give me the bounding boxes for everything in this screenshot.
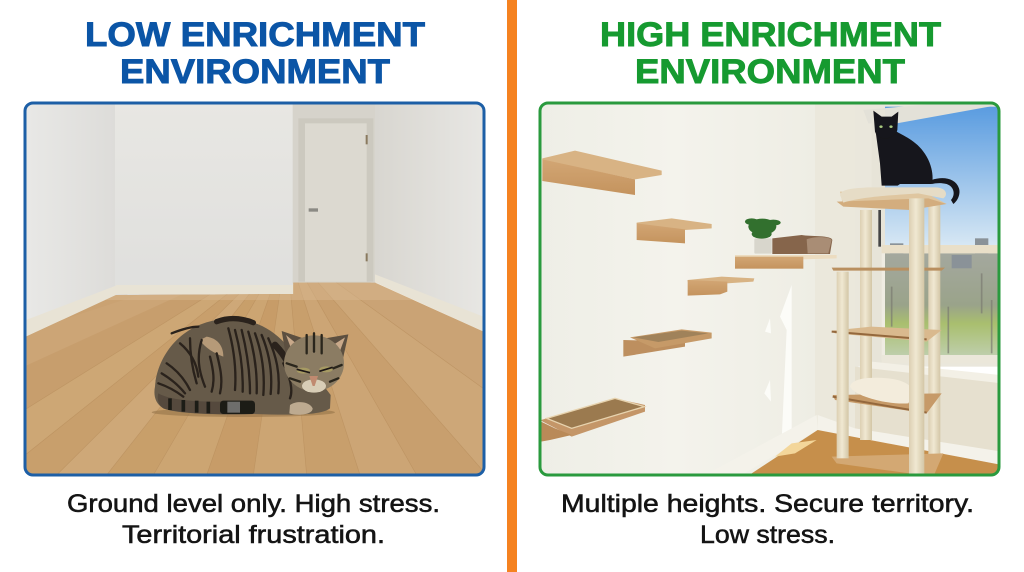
wall shelf 6 carpeted <box>541 398 645 442</box>
wood floor <box>752 430 998 474</box>
black cat on top of the tree <box>873 111 960 204</box>
frame: blue panel border <box>25 103 484 475</box>
panel: low enrichment room photo <box>26 104 482 474</box>
main wall <box>535 100 817 480</box>
wall shelf 4 <box>688 277 754 296</box>
cat head <box>282 331 348 393</box>
corner wall <box>815 104 858 438</box>
sunlight patches on wall <box>764 285 792 443</box>
right wall <box>376 104 482 316</box>
brown cat bed <box>772 235 832 254</box>
plant pot <box>754 238 772 254</box>
caption: high enrichment: Multiple heights. Secure territory. <box>561 490 974 518</box>
heading: high enrichment environment: HIGH ENRICHMENT <box>600 16 941 54</box>
cat: tabby loaf on the floor <box>152 319 335 417</box>
door alcove <box>293 100 376 283</box>
front posts <box>837 272 849 458</box>
caption: low enrichment: Ground level only. High stress. <box>67 490 440 518</box>
wood floor <box>26 282 482 474</box>
top cushion <box>840 187 946 203</box>
wall shelf 2 <box>637 218 712 243</box>
back posts <box>860 210 872 440</box>
wall shelf 5 carpeted <box>623 329 712 357</box>
caption: low enrichment: Territorial frustration. <box>122 521 385 549</box>
cat tree <box>832 187 947 477</box>
plant leaves <box>745 218 781 239</box>
left wall <box>20 100 115 340</box>
caption: low enrichment <box>67 490 440 549</box>
caption: high enrichment <box>561 490 974 549</box>
heading: high enrichment environment <box>600 16 941 91</box>
panel: high enrichment room photo <box>535 98 1002 480</box>
heading: low enrichment environment: LOW ENRICHMENT <box>85 16 425 54</box>
baseboards <box>26 274 483 337</box>
wall shelf 3 with plant and bed <box>735 218 837 269</box>
caption: high enrichment: Low stress. <box>700 521 835 549</box>
heading: low enrichment environment <box>85 16 425 91</box>
baseboards <box>782 416 998 464</box>
orange centre divider <box>507 0 517 572</box>
heading: low enrichment environment: ENVIRONMENT <box>120 53 390 91</box>
wall shelf 1 <box>542 151 662 195</box>
window with city park view <box>855 98 1002 467</box>
lower cushion bed <box>855 378 909 404</box>
frame: green panel border <box>540 103 999 475</box>
cat tree platforms <box>832 192 947 477</box>
back wall <box>115 100 293 297</box>
heading: high enrichment environment: ENVIRONMENT <box>635 53 905 91</box>
